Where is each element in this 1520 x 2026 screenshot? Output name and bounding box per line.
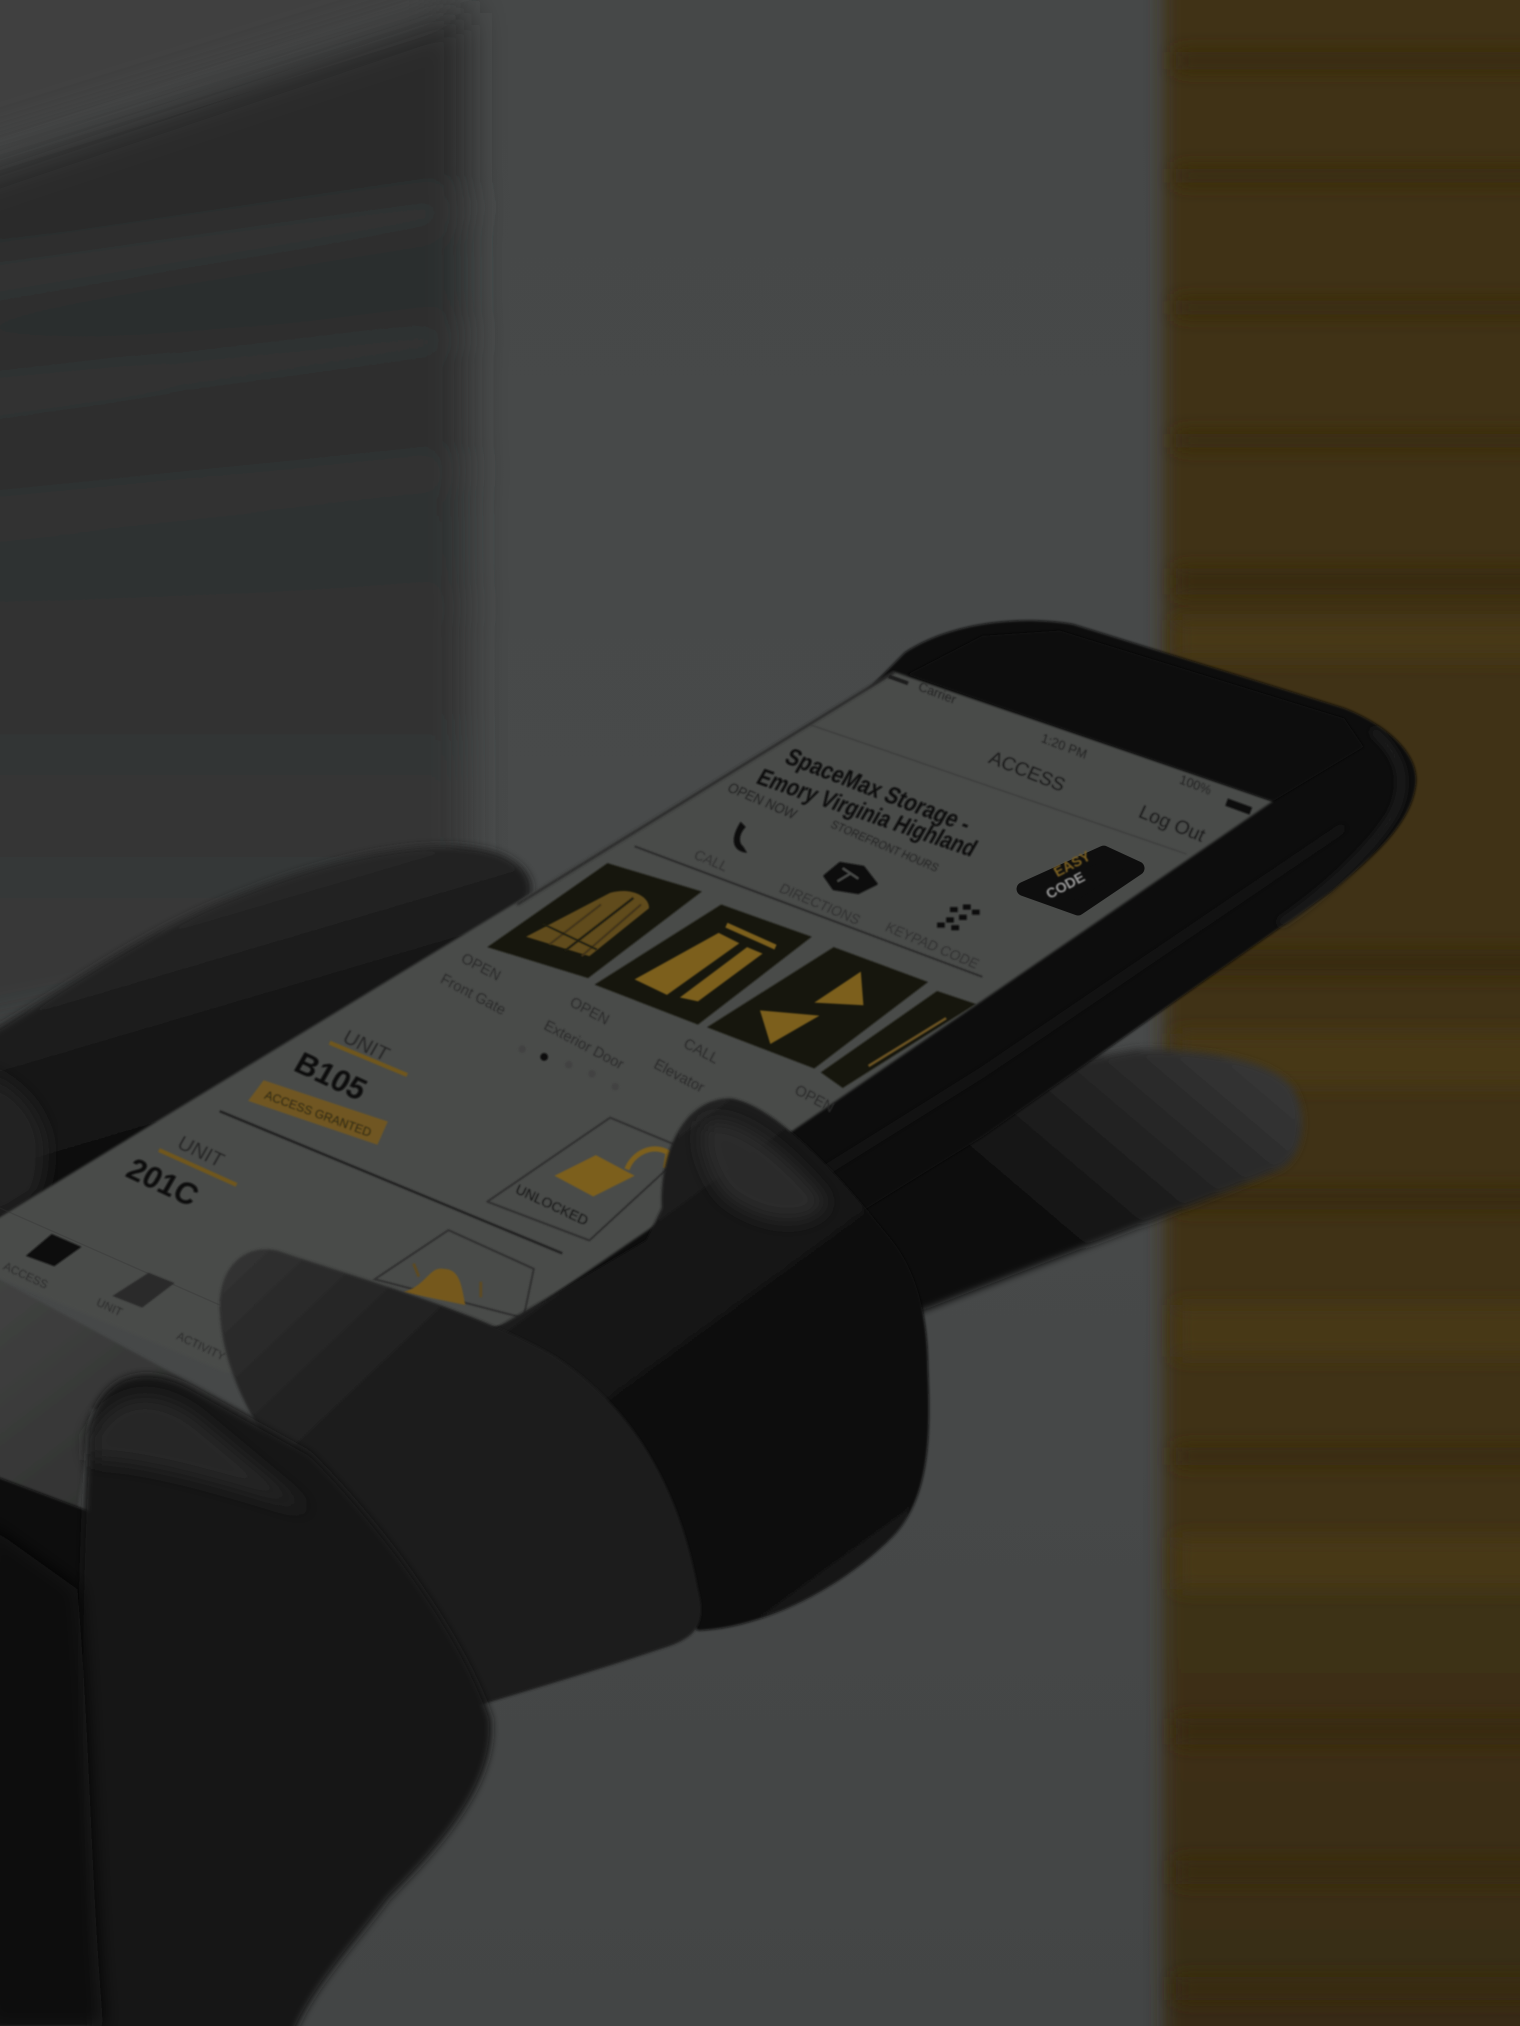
tab bar icons: UNIT [94, 1297, 124, 1319]
hours text: OPEN NOW [725, 780, 800, 822]
tab bar icons: ACCESS [1, 1261, 50, 1292]
status bar: 1:20 PM [1040, 730, 1089, 762]
quick action labels: KEYPAD CODE [883, 919, 982, 972]
tile: open exterior door [595, 904, 812, 1025]
unit B105 [248, 1026, 407, 1145]
golden striped door at right [1163, 0, 1520, 2026]
hours text [725, 780, 941, 875]
tile labels: Exterior Door [541, 1018, 626, 1073]
lower finger [80, 1375, 492, 2026]
unit 201C: 201C [121, 1151, 205, 1213]
facility title: Emory Virginia Highland [752, 764, 982, 862]
tile labels: OPEN [567, 995, 612, 1029]
easy code badge: CODE [1043, 869, 1088, 903]
phone speaker bezel [907, 631, 1364, 801]
body edge highlight [1280, 730, 1401, 924]
lower palm black [0, 1473, 388, 2026]
carousel dots [518, 1045, 619, 1091]
facility title: SpaceMax Storage - [781, 743, 977, 837]
tile labels: OPEN [458, 951, 503, 985]
unit 201C [121, 1132, 237, 1213]
tab bar icons: ACTIVITY [175, 1330, 227, 1363]
tile labels: Front Gate [438, 971, 508, 1019]
phone [0, 621, 1416, 1512]
header separator [810, 725, 1187, 854]
header nav text: Log Out [1135, 802, 1209, 847]
quick action labels [691, 847, 982, 972]
icon: keypad [937, 904, 980, 930]
tab bar icons [1, 1234, 227, 1363]
phone body [259, 621, 1416, 1460]
status bar: 100% [1178, 772, 1213, 798]
finger behind phone at right [776, 1049, 1302, 1318]
easy code badge: EASY [1051, 848, 1094, 881]
status bar [888, 674, 1252, 815]
tile labels: CALL [681, 1036, 721, 1068]
back hand holding phone [0, 846, 532, 1247]
easy code badge [1024, 848, 1137, 908]
phone white chin [0, 1273, 297, 1512]
tile: open front gate [487, 863, 702, 978]
status bar: Carrier [917, 679, 959, 707]
separators above tiles [635, 846, 982, 977]
tile labels: OPEN [792, 1083, 837, 1116]
quick action labels: CALL [691, 847, 731, 874]
quick action row [691, 822, 1137, 972]
tile labels: Elevator [651, 1057, 707, 1096]
icon: directions map [825, 863, 876, 893]
screen left edge line [517, 672, 894, 904]
unlocked button [487, 1118, 688, 1240]
unlocked button: UNLOCKED [513, 1181, 591, 1228]
tile: partial fourth [821, 991, 976, 1088]
tile: call elevator [707, 947, 928, 1069]
unit 201C: UNIT [173, 1132, 229, 1172]
unit B105: ACCESS GRANTED [263, 1088, 374, 1140]
header nav text: ACCESS [985, 748, 1068, 796]
header nav text [985, 748, 1209, 847]
thumb [220, 1249, 701, 1706]
index fingertip on screen [491, 1098, 929, 1631]
fingernail [702, 1120, 827, 1220]
alarm bell button [375, 1230, 534, 1318]
hand in front of phone: fingers [0, 1098, 929, 2026]
dark shuttered window at left [0, 13, 468, 1034]
screen [0, 672, 1273, 1372]
quick action labels: DIRECTIONS [777, 880, 863, 927]
hours text: STOREFRONT HOURS [828, 819, 941, 875]
icon: phone call [734, 822, 747, 853]
tile labels [438, 951, 837, 1116]
unit B105: UNIT [339, 1026, 394, 1066]
unit B105: B105 [289, 1045, 373, 1107]
